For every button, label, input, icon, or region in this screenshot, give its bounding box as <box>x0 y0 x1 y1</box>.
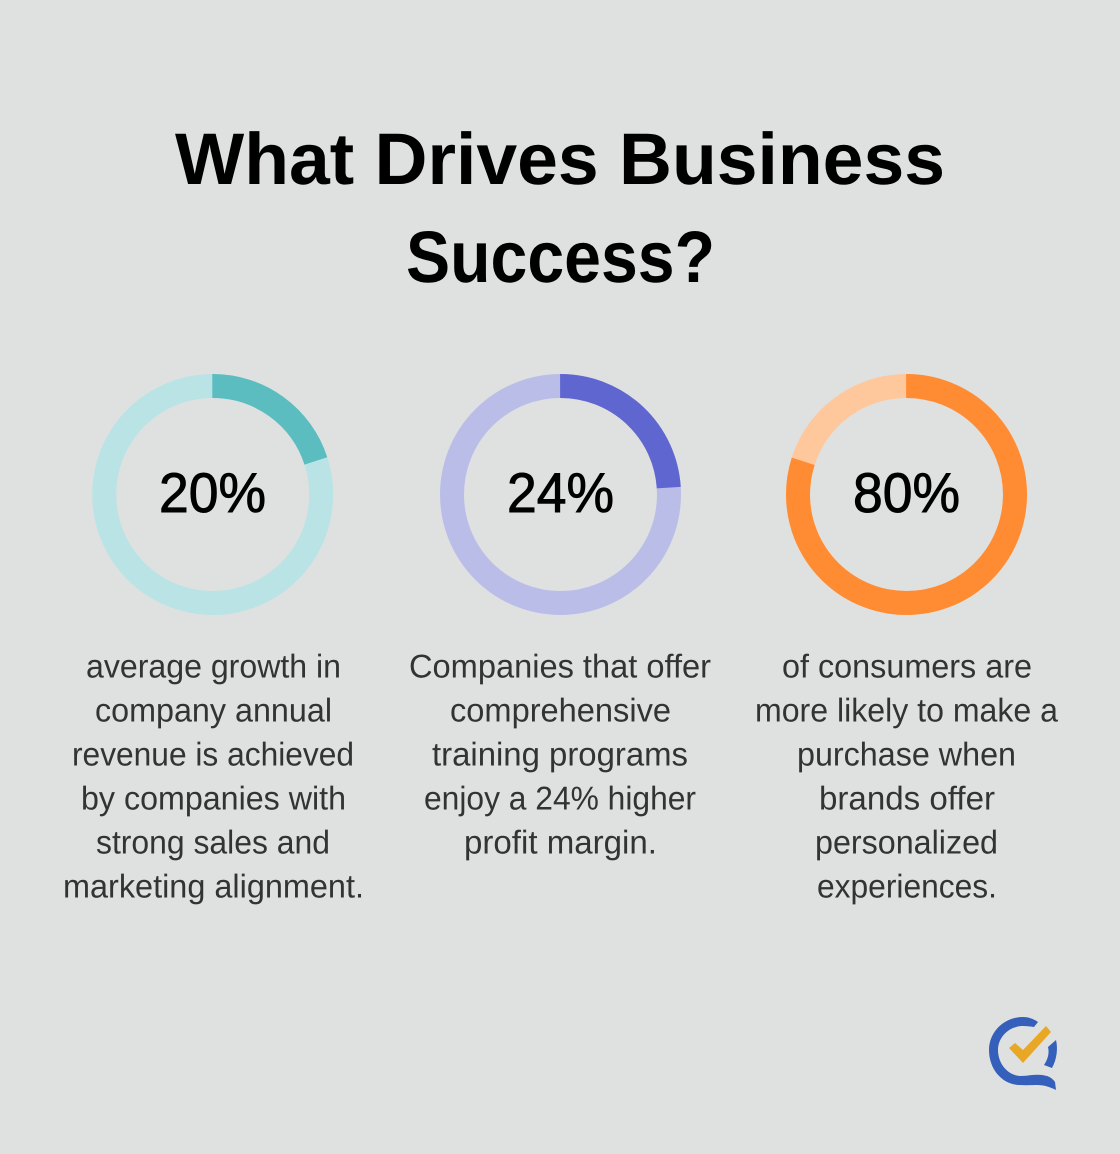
text: 24% description: enjoy a 24% higher <box>424 780 696 816</box>
text: 80% description: purchase when <box>797 736 1016 772</box>
donut chart: 24%: 24% <box>507 461 614 524</box>
text: 24% description: profit margin. <box>464 824 657 860</box>
text: 24% description <box>409 648 711 860</box>
text: 20% description: revenue is achieved <box>72 736 354 772</box>
title: Success? <box>406 217 715 298</box>
panel: 80% personalized experiences <box>755 386 1059 904</box>
donut chart: 24% <box>452 386 669 603</box>
text: 80% description <box>755 648 1059 904</box>
donut chart: 20%: 20% <box>159 461 266 524</box>
title <box>175 119 945 298</box>
text: 80% description: more likely to make a <box>755 692 1059 728</box>
panel: 20% sales and marketing alignment <box>63 386 364 904</box>
title: What Drives Business <box>175 119 945 200</box>
text: 80% description: brands offer <box>819 780 995 816</box>
text: 24% description: training programs <box>432 736 688 772</box>
text: 80% description: experiences. <box>817 868 997 904</box>
donut chart: 80% <box>798 386 1015 603</box>
text: 20% description: marketing alignment. <box>63 868 364 904</box>
text: 20% description: company annual <box>95 692 332 728</box>
text: 80% description: personalized <box>815 824 998 860</box>
text: 20% description: by companies with <box>81 780 346 816</box>
text: 20% description: average growth in <box>86 648 341 684</box>
text: 24% description: comprehensive <box>450 692 671 728</box>
icon: logo speech bubble with check mark <box>989 1017 1057 1090</box>
text: 20% description: strong sales and <box>96 824 330 860</box>
text: 80% description: of consumers are <box>782 648 1032 684</box>
text: 20% description <box>63 648 364 904</box>
panel: 24% training programs <box>409 386 711 860</box>
donut chart: 20% <box>104 386 321 603</box>
donut chart: 80%: 80% <box>853 461 960 524</box>
text: 24% description: Companies that offer <box>409 648 711 684</box>
